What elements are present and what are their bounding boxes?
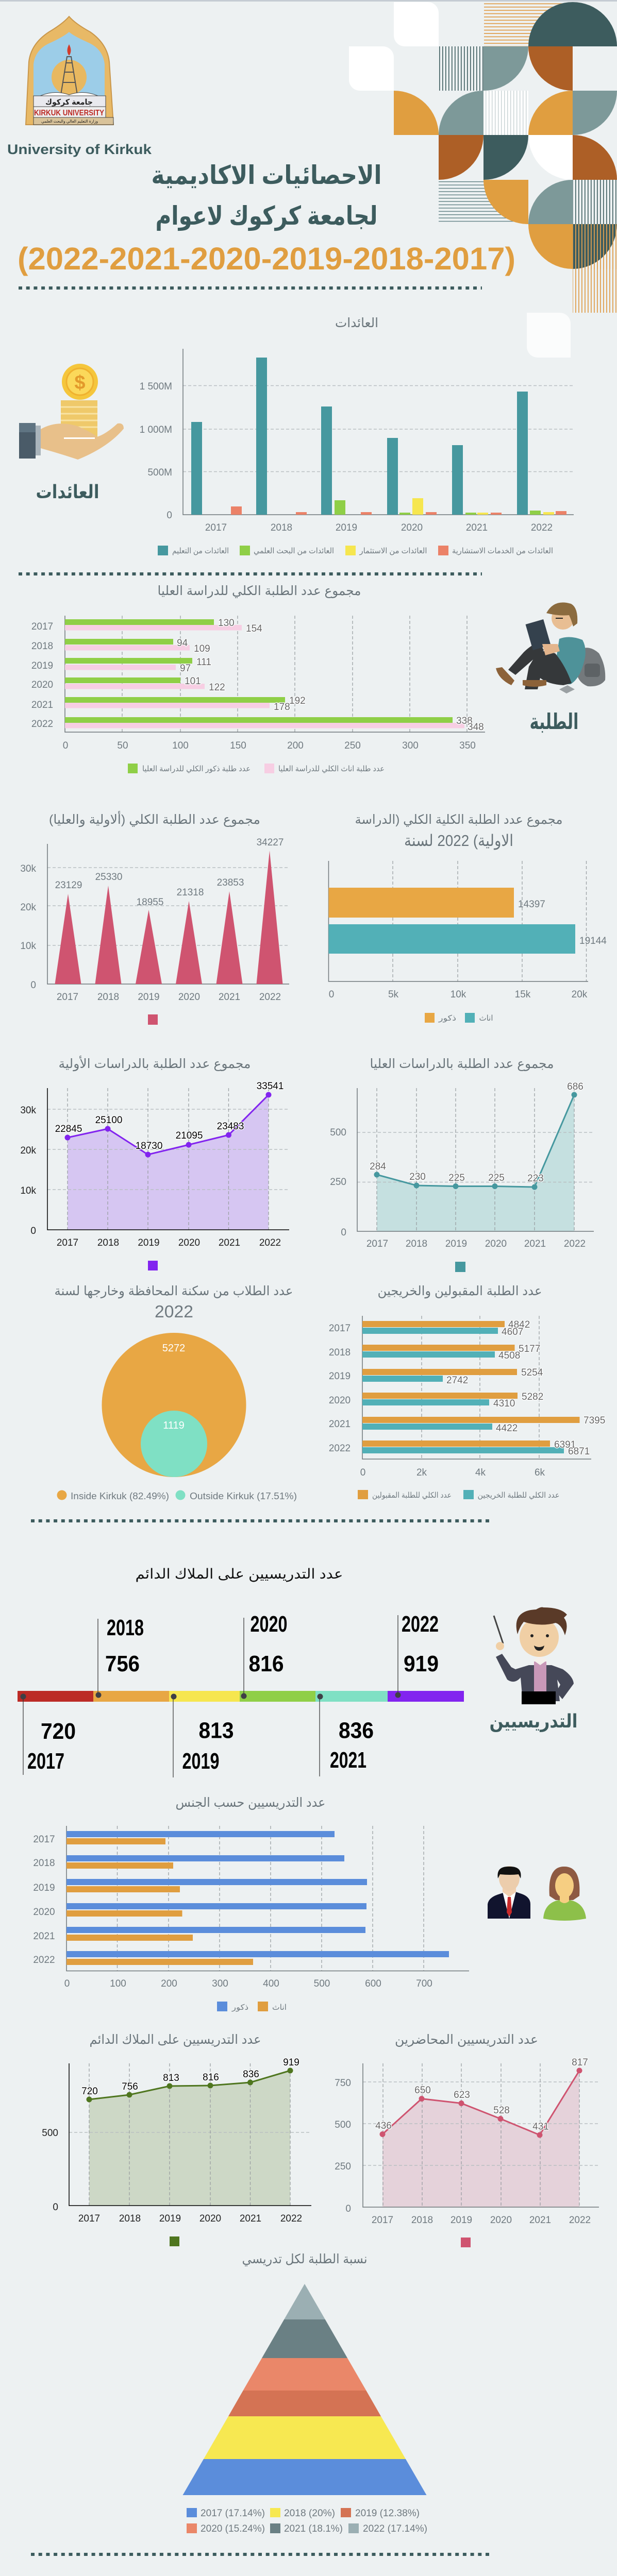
heading: مجموع عدد الطلبة الكلي (ألاولية والعليا) bbox=[49, 810, 260, 827]
area chart: 500 bbox=[42, 2128, 58, 2139]
area chart: 919 bbox=[283, 2057, 299, 2068]
bar chart: 0 bbox=[64, 1978, 70, 1989]
triangle chart: 23129 bbox=[55, 880, 82, 891]
area chart: 2021 bbox=[529, 2215, 551, 2226]
timeline bar: 2017 bbox=[27, 1749, 64, 1774]
pyramid chart bbox=[182, 2284, 427, 2495]
legend: عدد الكلي للطلبة الخريجين bbox=[477, 1491, 560, 1500]
bar chart: 2021 bbox=[33, 1931, 55, 1942]
area chart: 528 bbox=[493, 2105, 510, 2116]
area chart: 2020 bbox=[178, 1238, 200, 1248]
legend bbox=[187, 2508, 427, 2534]
area chart: 0 bbox=[53, 2202, 58, 2213]
area chart: 18730 bbox=[136, 1141, 162, 1151]
timeline bar: 813 bbox=[199, 1718, 234, 1743]
area chart: 250 bbox=[335, 2161, 351, 2172]
venn chart: 5272 bbox=[162, 1343, 185, 1354]
triangle chart: 21318 bbox=[177, 887, 204, 898]
horizontal bar chart: 300 bbox=[402, 740, 419, 751]
legend: ذكور bbox=[231, 2003, 248, 2012]
area chart: 2018 bbox=[119, 2213, 141, 2224]
icon: coins in hand: $ bbox=[74, 372, 86, 394]
revenue legend: العائدات من الخدمات الاستشارية bbox=[452, 547, 553, 555]
heading: مجموع عدد الطلبة بالدراسات الأولية bbox=[59, 1055, 251, 1072]
horizontal bar chart: 150 bbox=[230, 740, 246, 751]
bar chart: revenue: 500M bbox=[147, 467, 172, 478]
venn chart: 1119 bbox=[163, 1420, 185, 1431]
icon: student reading bbox=[496, 602, 605, 693]
area chart: 284 bbox=[370, 1161, 386, 1172]
icon: male and female staff bbox=[488, 1866, 586, 1921]
triangle chart: 2018 bbox=[97, 992, 119, 1003]
bar chart: 6871 bbox=[568, 1446, 590, 1457]
bar chart: revenue: 2019 bbox=[336, 522, 357, 533]
area chart: 686 bbox=[567, 1081, 583, 1092]
panel: students inside and outside governorate bbox=[55, 1284, 297, 1501]
panel: revenue bbox=[19, 316, 574, 556]
bar chart: revenue: 1 500M bbox=[140, 381, 172, 392]
area chart: 2019 bbox=[138, 1238, 160, 1248]
panel: undergraduate students bbox=[20, 1055, 289, 1270]
horizontal bar chart: 2018 bbox=[31, 641, 53, 652]
venn chart bbox=[102, 1333, 246, 1477]
bar chart: 600 bbox=[365, 1978, 381, 1989]
area chart: 2017 bbox=[372, 2215, 393, 2226]
timeline bar bbox=[18, 1612, 464, 1777]
horizontal bar chart: 192 bbox=[289, 696, 306, 706]
bar chart: 700 bbox=[416, 1978, 432, 1989]
area chart: 2018 bbox=[97, 1238, 119, 1248]
timeline bar: 2021 bbox=[330, 1748, 366, 1773]
horizontal bar chart: 111 bbox=[196, 657, 211, 668]
geometric header pattern bbox=[349, 2, 617, 358]
area chart: 10k bbox=[20, 1185, 36, 1196]
panel: staff by gender bbox=[33, 1795, 586, 2012]
timeline bar: 2020 bbox=[251, 1612, 288, 1637]
bar chart: 4607 bbox=[502, 1327, 523, 1337]
heading: عدد التدريسيين المحاضرين bbox=[395, 2032, 538, 2047]
area chart bbox=[20, 1081, 289, 1248]
bar chart: 5k bbox=[388, 989, 399, 1000]
panel: students per teacher pyramid bbox=[182, 2252, 427, 2534]
area chart: 33541 bbox=[257, 1081, 284, 1092]
bar chart: 2742 bbox=[446, 1375, 468, 1386]
area chart: 500 bbox=[330, 1127, 346, 1138]
area chart: 650 bbox=[414, 2085, 431, 2096]
area chart: 750 bbox=[335, 2078, 351, 2089]
triangle chart: 20k bbox=[20, 902, 36, 913]
heading bbox=[55, 1284, 293, 1321]
legend: عدد الكلي للطلبة المقبولين bbox=[372, 1491, 452, 1500]
triangle chart: 34227 bbox=[257, 837, 284, 848]
horizontal bar chart: 178 bbox=[274, 702, 290, 713]
horizontal bar chart: 130 bbox=[218, 618, 235, 629]
heading: 2022 bbox=[155, 1302, 193, 1321]
bar chart: 7395 bbox=[583, 1415, 605, 1426]
area chart bbox=[330, 1081, 594, 1249]
area chart: 2019 bbox=[445, 1239, 467, 1249]
area chart: 436 bbox=[375, 2121, 392, 2131]
horizontal bar chart: 2017 bbox=[31, 621, 53, 632]
legend bbox=[425, 1013, 493, 1023]
horizontal bar chart: 2019 bbox=[31, 660, 53, 671]
area chart: 813 bbox=[163, 2073, 179, 2083]
area chart bbox=[335, 2057, 599, 2226]
horizontal bar chart: 2021 bbox=[31, 700, 53, 710]
heading: عدد التدريسيين على الملاك الدائم bbox=[135, 1566, 343, 1582]
bar chart: 10k bbox=[451, 989, 466, 1000]
area chart: 2020 bbox=[199, 2213, 221, 2224]
horizontal bar chart: 50 bbox=[117, 740, 128, 751]
area chart: 2022 bbox=[280, 2213, 302, 2224]
bar chart: revenue: 2017 bbox=[205, 522, 227, 533]
legend swatch bbox=[170, 2236, 179, 2246]
legend: 2017 (17.14%) bbox=[201, 2508, 265, 2519]
timeline bar: 756 bbox=[105, 1651, 140, 1676]
bar chart: 4842 bbox=[508, 1319, 530, 1330]
area chart: 2017 bbox=[366, 1239, 388, 1249]
panel: permanent staff line bbox=[42, 2032, 311, 2246]
legend: Inside Kirkuk (82.49%) bbox=[71, 1491, 169, 1501]
area chart: 2017 bbox=[78, 2213, 100, 2224]
university logo bbox=[26, 16, 113, 125]
bar chart bbox=[329, 1316, 605, 1478]
bar chart: 15k bbox=[515, 989, 531, 1000]
bar chart: 2017 bbox=[33, 1834, 55, 1845]
area chart: 23483 bbox=[217, 1121, 244, 1132]
bar chart: 400 bbox=[263, 1978, 279, 1989]
area chart: 20k bbox=[20, 1145, 36, 1156]
heading: عدد الطلاب من سكنة المحافظة وخارجها لسنة bbox=[55, 1284, 293, 1299]
bar chart: revenue bbox=[140, 349, 574, 533]
bar chart: 2021 bbox=[329, 1419, 351, 1430]
horizontal bar chart: 101 bbox=[185, 676, 201, 687]
heading: الاولية) 2022 لسنة bbox=[404, 832, 513, 850]
panel: admitted and graduates bbox=[329, 1284, 605, 1500]
panel: postgraduate students bbox=[330, 1057, 594, 1272]
heading: مجموع عدد الطلبة بالدراسات العليا bbox=[370, 1057, 554, 1071]
area chart: 2019 bbox=[159, 2213, 181, 2224]
area chart: 0 bbox=[345, 2204, 351, 2214]
revenue heading: العائدات bbox=[335, 316, 378, 330]
area chart: 2022 bbox=[569, 2215, 591, 2226]
area chart: 623 bbox=[454, 2090, 470, 2100]
area chart bbox=[42, 2057, 311, 2224]
heading: مجموع عدد الطلبة الكلي للدراسة العليا bbox=[158, 584, 361, 598]
heading: عدد التدريسيين حسب الجنس bbox=[175, 1795, 326, 1810]
bar chart: 4310 bbox=[493, 1398, 515, 1409]
bar chart: 4508 bbox=[498, 1350, 520, 1361]
revenue section label: العائدات bbox=[36, 481, 99, 502]
legend: اناث bbox=[479, 1014, 493, 1023]
timeline bar: 816 bbox=[248, 1651, 284, 1676]
bar chart: revenue: 1 000M bbox=[140, 425, 172, 435]
legend: عدد طلبة اناث الكلي للدراسة العليا bbox=[278, 765, 385, 774]
teachers section label: التدريسيين bbox=[490, 1710, 577, 1732]
bar chart: 0 bbox=[360, 1467, 365, 1478]
bar chart: revenue: 0 bbox=[166, 510, 172, 521]
area chart: 720 bbox=[81, 2086, 98, 2097]
bar chart: 500 bbox=[314, 1978, 330, 1989]
timeline bar: 720 bbox=[41, 1719, 76, 1744]
panel: college total 2022 bbox=[329, 812, 607, 1023]
area chart: 2017 bbox=[57, 1238, 78, 1248]
area chart: 2022 bbox=[259, 1238, 281, 1248]
bar chart: 6391 bbox=[554, 1439, 576, 1450]
bar chart: 2019 bbox=[33, 1883, 55, 1893]
area chart: 2018 bbox=[411, 2215, 433, 2226]
bar chart: 0 bbox=[329, 989, 334, 1000]
triangle chart: 0 bbox=[30, 980, 36, 991]
area chart: 25100 bbox=[95, 1115, 122, 1126]
triangle chart: 25330 bbox=[95, 872, 122, 883]
timeline bar: 2019 bbox=[182, 1749, 220, 1774]
icon: teacher bbox=[494, 1607, 574, 1704]
bar chart: 19144 bbox=[579, 936, 607, 946]
triangle chart: 18955 bbox=[137, 897, 163, 908]
horizontal bar chart: 154 bbox=[246, 623, 262, 634]
area chart: 21095 bbox=[176, 1130, 203, 1141]
area chart: 250 bbox=[330, 1177, 346, 1188]
legend: 2018 (20%) bbox=[284, 2508, 335, 2519]
horizontal bar chart: 200 bbox=[287, 740, 304, 751]
bar chart: 5177 bbox=[519, 1344, 540, 1354]
legend: 2022 (17.14%) bbox=[363, 2523, 427, 2534]
timeline bar: 2018 bbox=[107, 1615, 144, 1640]
bar chart: 2022 bbox=[329, 1443, 351, 1454]
triangle chart: 23853 bbox=[217, 877, 244, 888]
bar chart: 5282 bbox=[522, 1392, 543, 1402]
heading: مجموع عدد الطلبة الكلية الكلي (الدراسة bbox=[355, 812, 563, 827]
panel: lecturers bbox=[335, 2032, 599, 2247]
area chart: 22845 bbox=[55, 1124, 82, 1134]
area chart: 2018 bbox=[406, 1239, 427, 1249]
bar chart: 14397 bbox=[518, 899, 545, 910]
university name: University of Kirkuk bbox=[7, 142, 152, 157]
bar chart: 20k bbox=[572, 989, 588, 1000]
icon: coins in hand bbox=[19, 364, 124, 460]
area chart: 756 bbox=[122, 2081, 138, 2092]
panel: total students bbox=[20, 810, 289, 1025]
triangle chart: 2020 bbox=[178, 992, 200, 1003]
title: الاحصائيات الاكاديمية bbox=[152, 161, 381, 190]
legend swatch bbox=[461, 2238, 471, 2247]
legend: اناث bbox=[272, 2003, 287, 2012]
title: (2022-2021-2020-2019-2018-2017) bbox=[18, 241, 515, 277]
triangle chart: 2022 bbox=[259, 992, 281, 1003]
legend swatch bbox=[148, 1014, 158, 1025]
title: لجامعة كركوك لاعوام bbox=[156, 201, 377, 231]
bar chart bbox=[329, 861, 607, 1000]
horizontal bar chart: 109 bbox=[194, 643, 210, 654]
area chart: 2020 bbox=[485, 1239, 507, 1249]
revenue legend: العائدات من التعليم bbox=[172, 547, 229, 555]
students section label: الطلبة bbox=[530, 709, 578, 734]
horizontal bar chart: 97 bbox=[180, 663, 191, 674]
horizontal bar chart: 122 bbox=[209, 682, 225, 693]
legend: ذكور bbox=[438, 1014, 456, 1023]
heading: نسبة الطلبة لكل تدريسي bbox=[242, 2252, 367, 2266]
timeline bar: 836 bbox=[339, 1718, 374, 1743]
bar chart: revenue: 2018 bbox=[271, 522, 292, 533]
legend bbox=[358, 1490, 560, 1500]
area chart: 2022 bbox=[564, 1239, 586, 1249]
horizontal bar chart: 2022 bbox=[31, 719, 53, 730]
legend swatch bbox=[148, 1261, 158, 1270]
area chart: 2020 bbox=[490, 2215, 512, 2226]
legend: 2019 (12.38%) bbox=[355, 2508, 420, 2519]
horizontal bar chart bbox=[31, 616, 485, 751]
legend bbox=[57, 1490, 297, 1501]
horizontal bar chart: 94 bbox=[177, 638, 188, 649]
legend swatch bbox=[455, 1262, 465, 1272]
area chart: 2021 bbox=[524, 1239, 546, 1249]
horizontal bar chart: 100 bbox=[172, 740, 189, 751]
area chart: 2019 bbox=[451, 2215, 472, 2226]
area chart: 223 bbox=[527, 1173, 544, 1184]
area chart: 225 bbox=[488, 1173, 505, 1183]
bar chart: revenue: 2022 bbox=[531, 522, 553, 533]
horizontal bar chart: 338 bbox=[456, 716, 473, 726]
bar chart: 6k bbox=[535, 1467, 545, 1478]
triangle chart: 30k bbox=[20, 863, 36, 874]
bar chart: 300 bbox=[212, 1978, 228, 1989]
horizontal bar chart: 350 bbox=[459, 740, 476, 751]
area chart: 500 bbox=[335, 2120, 351, 2130]
triangle chart: 2021 bbox=[219, 992, 240, 1003]
triangle chart bbox=[20, 837, 289, 1003]
bar chart: revenue: 2020 bbox=[401, 522, 423, 533]
area chart: 836 bbox=[243, 2069, 259, 2080]
legend bbox=[128, 764, 385, 774]
revenue legend: العائدات من الاستثمار bbox=[359, 547, 427, 555]
area chart: 225 bbox=[448, 1173, 465, 1183]
title bbox=[18, 161, 515, 277]
bar chart: 4k bbox=[475, 1467, 486, 1478]
bar chart: revenue: 2021 bbox=[466, 522, 488, 533]
area chart: 817 bbox=[572, 2057, 588, 2068]
bar chart: 2017 bbox=[329, 1323, 351, 1334]
legend: 2020 (15.24%) bbox=[201, 2523, 265, 2534]
bar chart: 2020 bbox=[329, 1395, 351, 1406]
bar chart: 2019 bbox=[329, 1371, 351, 1382]
bar chart: 2022 bbox=[33, 1955, 55, 1965]
triangle chart: 2019 bbox=[138, 992, 160, 1003]
panel: permanent staff timeline bbox=[18, 1566, 577, 1777]
bar chart bbox=[33, 1826, 469, 1989]
bar chart: 2018 bbox=[33, 1858, 55, 1869]
area chart: 2021 bbox=[240, 2213, 261, 2224]
legend: Outside Kirkuk (17.51%) bbox=[190, 1491, 297, 1501]
area chart: 0 bbox=[30, 1226, 36, 1236]
heading: عدد الطلبة المقبولين والخريجين bbox=[377, 1284, 542, 1299]
bar chart: 100 bbox=[110, 1978, 126, 1989]
heading bbox=[355, 812, 563, 850]
area chart: 816 bbox=[203, 2072, 219, 2083]
triangle chart: 2017 bbox=[57, 992, 78, 1003]
horizontal bar chart: 348 bbox=[468, 722, 484, 733]
university logo: KIRKUK UNIVERSITY bbox=[34, 109, 104, 117]
area chart: 30k bbox=[20, 1105, 36, 1116]
legend: عدد طلبة ذكور الكلي للدراسة العليا bbox=[142, 765, 251, 774]
university logo: جامعة كركوك bbox=[45, 98, 93, 107]
area chart: 431 bbox=[532, 2122, 549, 2132]
legend: 2021 (18.1%) bbox=[284, 2523, 343, 2534]
timeline bar: 2022 bbox=[402, 1612, 439, 1637]
bar chart: 5254 bbox=[521, 1367, 543, 1378]
bar chart: 2018 bbox=[329, 1347, 351, 1358]
triangle chart: 10k bbox=[20, 941, 36, 952]
panel: postgraduate total bbox=[31, 584, 605, 774]
legend bbox=[217, 2002, 287, 2012]
bar chart: 200 bbox=[161, 1978, 177, 1989]
horizontal bar chart: 0 bbox=[63, 740, 68, 751]
area chart: 230 bbox=[409, 1172, 426, 1182]
bar chart: 2k bbox=[416, 1467, 427, 1478]
university logo: وزارة التعليم العالي والبحث العلمي bbox=[41, 119, 98, 124]
horizontal bar chart: 250 bbox=[344, 740, 361, 751]
area chart: 0 bbox=[341, 1227, 346, 1238]
heading: عدد التدريسيين على الملاك الدائم bbox=[90, 2032, 261, 2047]
bar chart: 4422 bbox=[496, 1423, 518, 1434]
area chart: 2021 bbox=[219, 1238, 240, 1248]
timeline bar: 919 bbox=[404, 1651, 439, 1676]
revenue legend: العائدات من البحث العلمي bbox=[254, 547, 334, 556]
horizontal bar chart: 2020 bbox=[31, 680, 53, 690]
bar chart: 2020 bbox=[33, 1907, 55, 1918]
revenue legend bbox=[158, 546, 553, 556]
